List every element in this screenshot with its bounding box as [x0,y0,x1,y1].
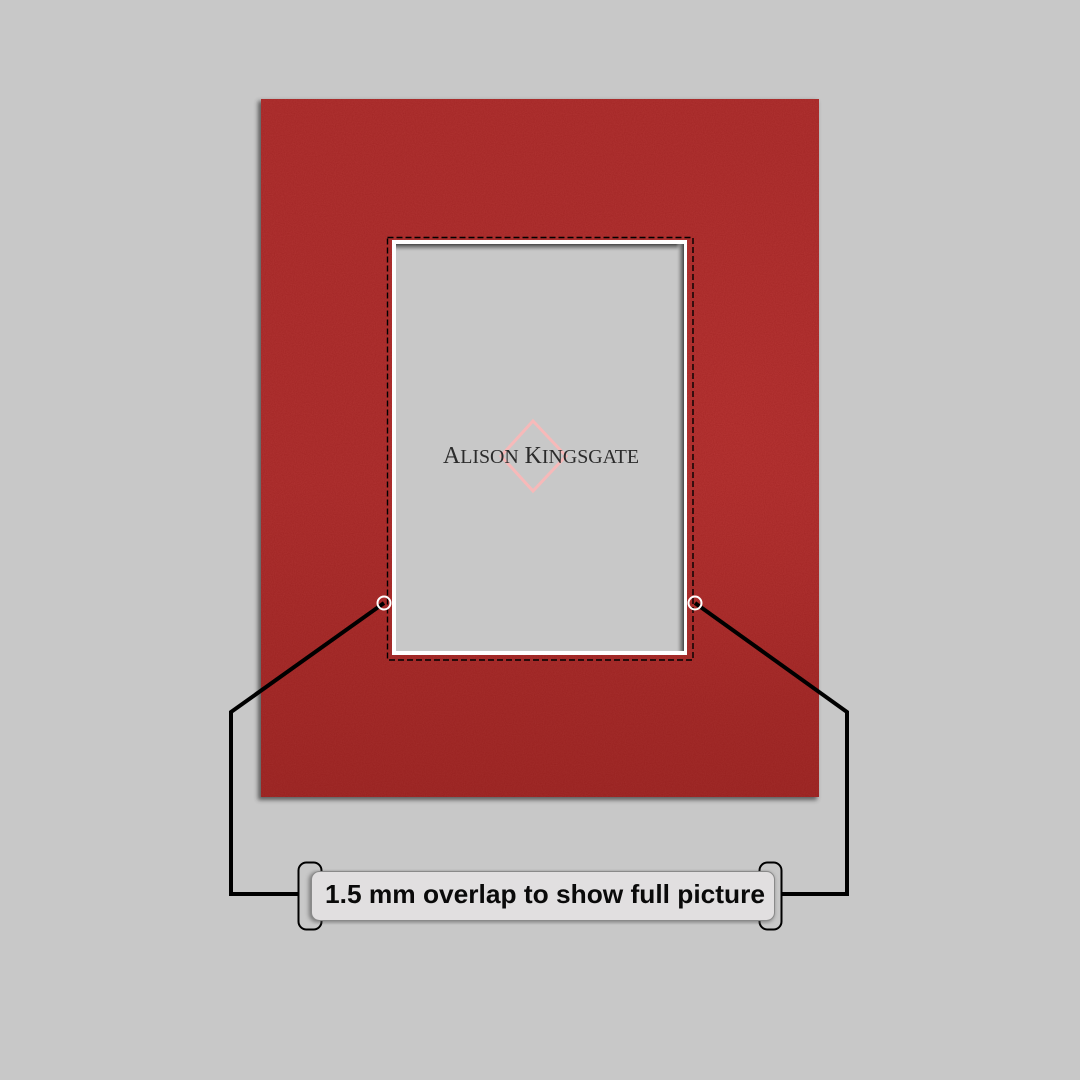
arrow: right leader line [695,603,847,894]
bracket: left [298,862,322,930]
bracket: right [760,862,782,930]
marker: right overlap point [688,596,702,610]
arrow: left leader line [231,603,384,894]
callout text: 1.5 mm overlap to show full picture [325,879,765,909]
icon: pink diamond [501,421,566,491]
marker: left overlap point [378,596,390,610]
callout: overlap label [309,872,774,922]
panel: red mat board [258,99,819,800]
logo wordmark: ALISON KINGSGATE [443,443,639,469]
logo: Alison Kingsgate [443,421,639,491]
picture window [392,240,687,655]
dashed overlap outline [388,238,693,660]
